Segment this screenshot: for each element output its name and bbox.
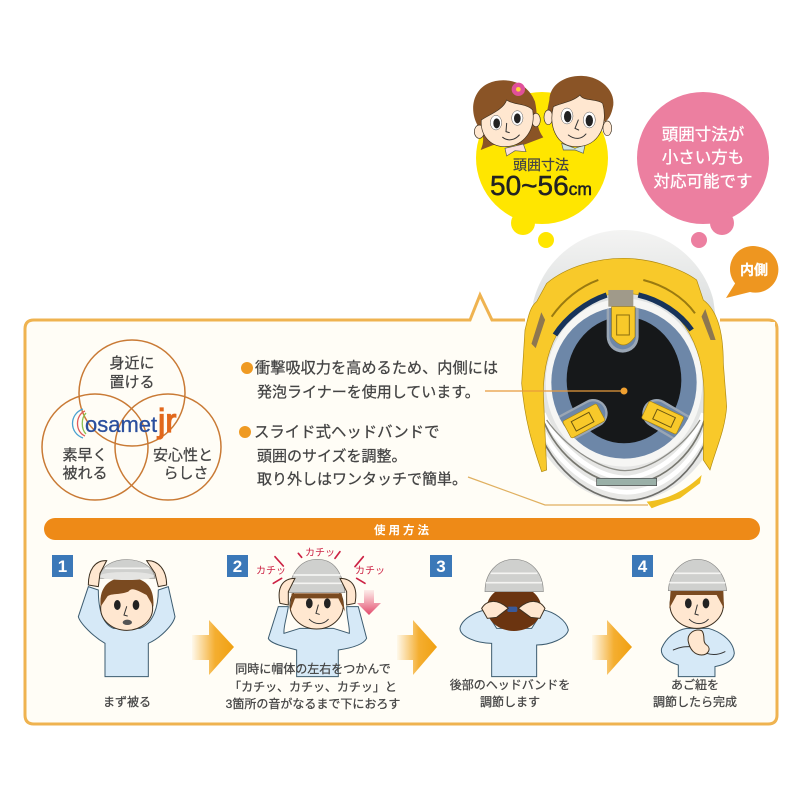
step 4 figure	[661, 559, 734, 677]
step 3 figure	[460, 559, 568, 677]
speech bubble: head size	[476, 92, 608, 248]
step 4 number: 4	[638, 557, 648, 576]
text: headband feature	[239, 423, 467, 488]
callout line: liner	[485, 388, 628, 394]
venn diagram	[42, 340, 221, 500]
speech bubble: small head note	[637, 92, 769, 248]
logo: osamet jr	[72, 402, 176, 439]
rear adjuster	[647, 475, 702, 508]
venn diagram: 置ける	[109, 374, 155, 391]
text: head size value: 50~56cm	[490, 170, 592, 201]
step 2 caption: 「カチッ、カチッ、カチッ」と	[229, 680, 397, 694]
logo: osamet jr: jr	[157, 402, 176, 439]
arrow 2	[397, 620, 437, 675]
step 4 caption: あご紐を	[671, 677, 719, 692]
speech bubble: small head note: 対応可能です	[654, 172, 752, 191]
kachi sound labels: カチッ	[256, 565, 286, 577]
white shell	[523, 230, 727, 502]
red down arrow	[357, 590, 381, 615]
step 2 number	[227, 555, 248, 577]
step 1 number	[52, 555, 73, 577]
arrow 3	[592, 620, 632, 675]
step 3 caption: 後部のヘッドバンドを	[450, 678, 570, 692]
yellow frame	[522, 258, 727, 472]
speech bubble: small head note: 小さい方も	[662, 148, 744, 167]
kachi sound labels	[256, 547, 385, 577]
rings	[530, 397, 717, 501]
text: headband feature: 取り外しはワンタッチで簡単。	[257, 470, 467, 488]
text: liner feature: 発泡ライナーを使用しています。	[257, 384, 480, 401]
kachi sound labels: カチッ	[305, 547, 335, 559]
logo: osamet jr: osamet	[85, 412, 157, 437]
kachi sound labels: カチッ	[355, 565, 385, 577]
callout line: headband	[468, 477, 648, 505]
clips	[608, 290, 633, 307]
step 1 figure	[78, 560, 175, 677]
step 1 caption: まず被る	[103, 695, 151, 709]
text: liner feature	[241, 360, 498, 401]
step 2 caption: 同時に帽体の左右をつかんで	[235, 661, 391, 676]
notches	[558, 308, 690, 439]
callout bubble: inside: 内側	[740, 262, 768, 278]
venn diagram: 安心性と	[153, 447, 213, 464]
step 2 caption: 3箇所の音がなるまで下におろす	[226, 696, 400, 711]
helmet interior	[522, 230, 727, 508]
white ring and blue liner	[546, 299, 702, 467]
step 3 number: 3	[436, 557, 446, 576]
step 4 caption: 調節したら完成	[653, 695, 737, 709]
step 2 number: 2	[233, 557, 242, 576]
text: head size label: 頭囲寸法	[513, 157, 569, 173]
step 3 caption: 調節します	[480, 695, 540, 709]
step 2 figure	[268, 552, 367, 677]
step 3 number	[430, 555, 452, 577]
heading bar: how to use	[44, 518, 760, 540]
illustration: girl and boy faces	[473, 76, 613, 156]
callout bubble: inside	[726, 246, 778, 298]
venn diagram: らしさ	[163, 465, 209, 482]
venn diagram: 身近に	[109, 355, 155, 372]
step 1 number: 1	[58, 557, 67, 576]
text: liner feature: 衝撃吸収力を高めるため、内側には	[255, 360, 498, 377]
heading bar: how to use: 使用方法	[374, 523, 432, 537]
venn diagram: 被れる	[62, 465, 108, 482]
step 3 caption	[450, 678, 570, 709]
arrow 1	[192, 620, 234, 675]
step 4 caption	[653, 677, 737, 709]
panel filler behind helmet	[500, 322, 775, 512]
text: headband feature: 頭囲のサイズを調整。	[257, 448, 407, 465]
step 2 caption	[226, 661, 400, 711]
venn diagram: 素早く	[62, 447, 108, 464]
speech bubble: small head note: 頭囲寸法が	[662, 125, 745, 144]
step 4 number	[632, 555, 653, 577]
navy band	[555, 295, 607, 335]
text: headband feature: スライド式ヘッドバンドで	[254, 423, 439, 441]
black pad	[567, 317, 681, 443]
panel: product information and usage	[25, 295, 777, 724]
